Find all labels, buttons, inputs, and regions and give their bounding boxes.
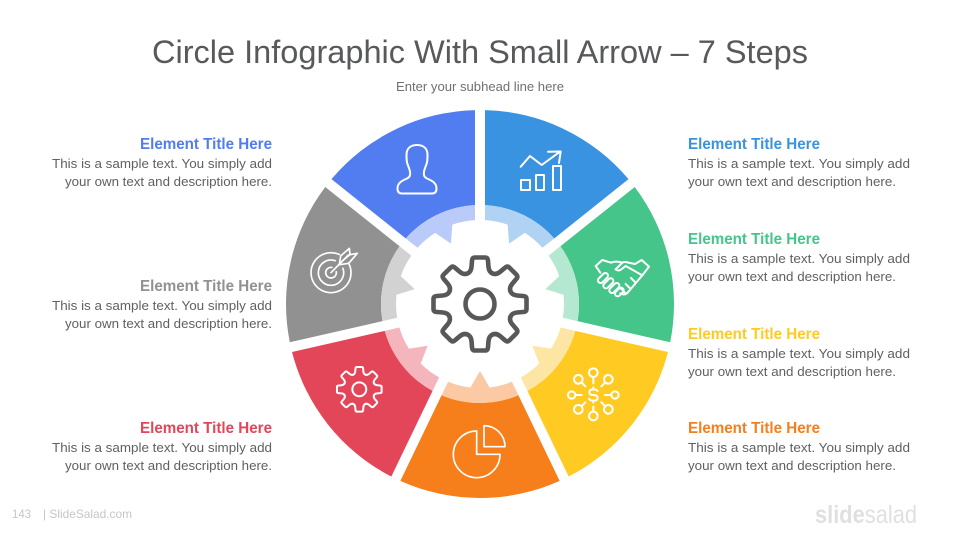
description: This is a sample text. You simply add [52, 298, 272, 313]
description: This is a sample text. You simply add [688, 251, 910, 266]
heading: Element Title Here [688, 231, 820, 248]
description: This is a sample text. You simply add [52, 440, 272, 455]
description: your own text and description here. [65, 174, 272, 189]
wedge: red [279, 299, 458, 487]
footer: page number and site: 143 [12, 507, 31, 521]
description: your own text and description here. [65, 458, 272, 473]
wedge: green [551, 183, 687, 361]
wedge: gray [273, 183, 409, 361]
description: your own text and description here. [688, 269, 896, 284]
heading: Element Title Here [140, 278, 272, 295]
text block: gray [52, 278, 272, 331]
description: This is a sample text. You simply add [688, 440, 910, 455]
logo: slidesalad: slidesalad [815, 501, 917, 529]
panel: segment orange (pie chart) [400, 371, 560, 498]
panel: segment green (handshake) [537, 183, 687, 361]
subhead: Enter your subhead line here [396, 79, 564, 94]
footer: page number and site: | SlideSalad.com [43, 507, 132, 521]
title: Circle Infographic With Small Arrow – 7 Steps [152, 34, 808, 70]
ring with small arrow: yellow [508, 316, 581, 396]
description: This is a sample text. You simply add [52, 156, 272, 171]
center gear icon [434, 258, 526, 350]
panel: segment blue (user) [324, 95, 512, 260]
ring with small arrow: light blue [474, 198, 558, 260]
description: your own text and description here. [65, 316, 272, 331]
wedge: yellow [502, 299, 681, 487]
ring with small arrow: orange [442, 371, 518, 403]
text block: green [688, 231, 910, 284]
heading: Element Title Here [140, 136, 272, 153]
description: your own text and description here. [688, 364, 896, 379]
heading: Element Title Here [140, 420, 272, 437]
icon: user [398, 145, 436, 194]
panel: segment light blue (growth chart) [448, 95, 636, 260]
panel: segment gray (target) [273, 183, 423, 361]
wedge: blue [324, 95, 512, 256]
text block: orange [688, 420, 910, 473]
icon: pie chart [453, 426, 505, 478]
icon: gear [337, 367, 382, 412]
heading: Element Title Here [688, 326, 820, 343]
text block: light blue [688, 136, 910, 189]
description: your own text and description here. [688, 174, 896, 189]
icon: dollar network [568, 368, 619, 420]
icon: handshake [596, 260, 649, 297]
wedge: orange [400, 395, 560, 498]
text block: yellow [688, 326, 910, 379]
description: This is a sample text. You simply add [688, 346, 910, 361]
text block: red [52, 420, 272, 473]
heading: Element Title Here [688, 420, 820, 437]
description: This is a sample text. You simply add [688, 156, 910, 171]
panel: segment yellow (dollar network) [502, 299, 681, 487]
ring with small arrow: red [379, 316, 452, 396]
ring with small arrow: green [537, 245, 585, 327]
icon: growth chart [521, 152, 561, 190]
ring with small arrow: blue [402, 198, 486, 260]
panel: segment red (gear) [279, 299, 458, 487]
ring with small arrow: gray [375, 245, 423, 327]
description: your own text and description here. [688, 458, 896, 473]
icon: target [311, 248, 357, 293]
heading: Element Title Here [688, 136, 820, 153]
wedge: light blue [448, 95, 636, 256]
text block: blue [52, 136, 272, 189]
